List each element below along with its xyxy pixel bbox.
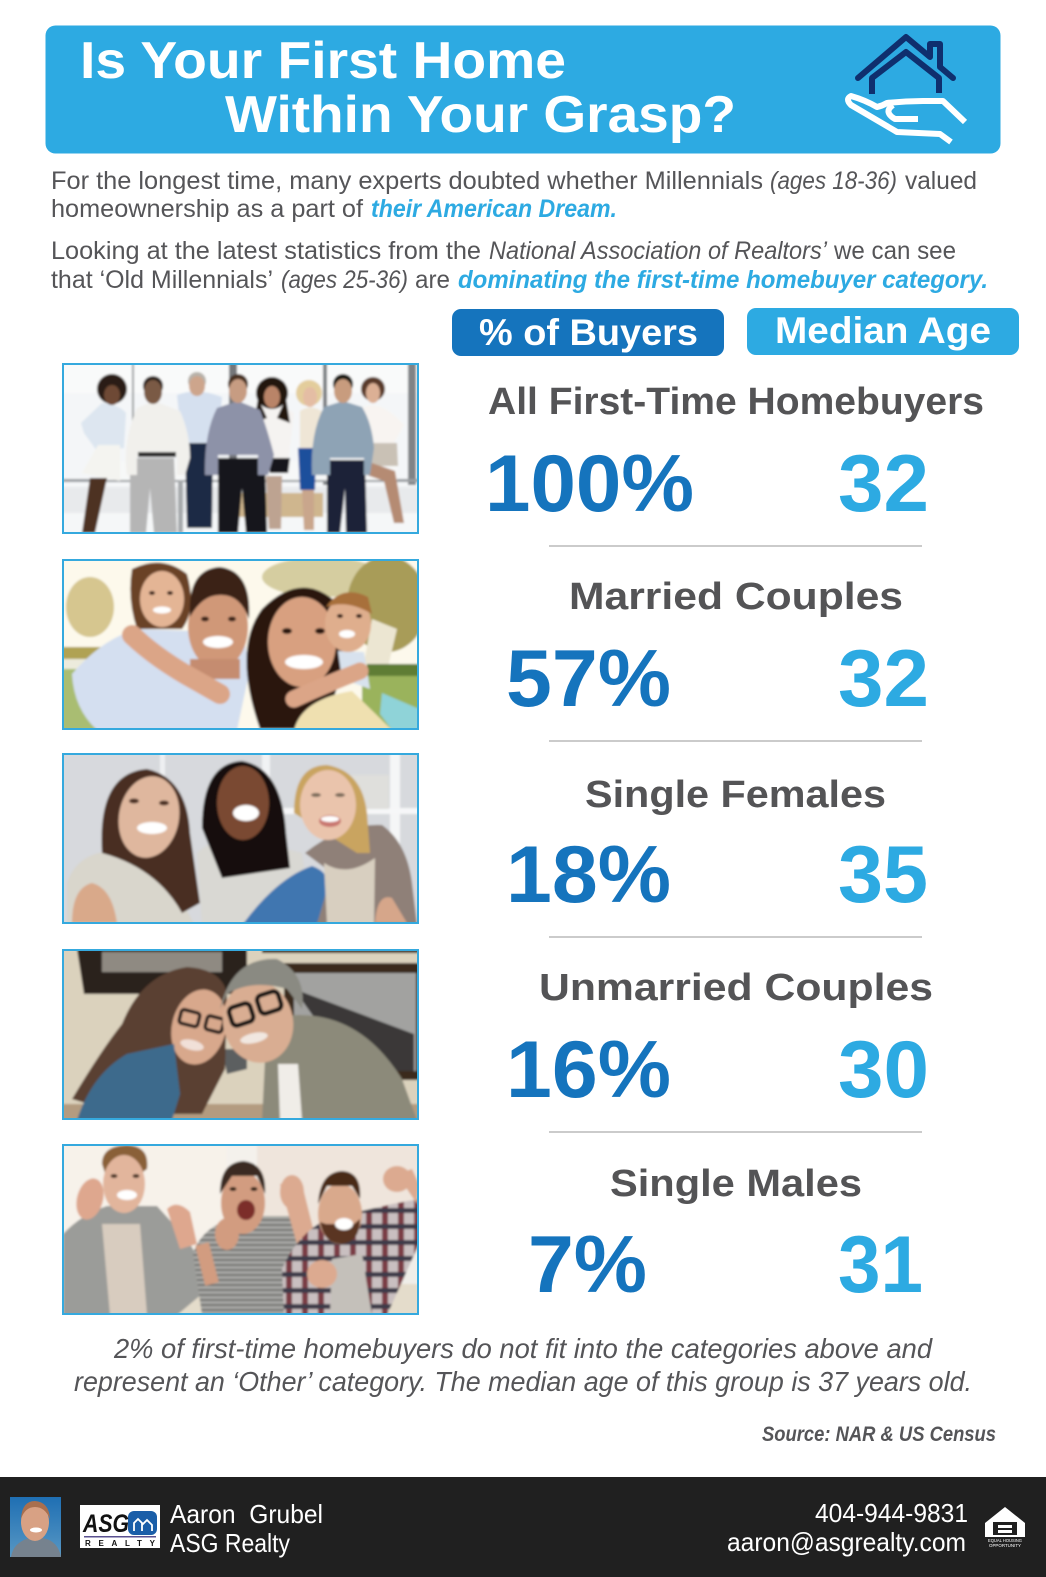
intro paragraph 1: (ages 18-36) [770,167,897,195]
photo border [63,754,418,923]
footnote: 2% of first-time homebuyers do not fit into the categories above and [113,1333,933,1364]
row: single females: Single Females [585,774,886,816]
icon: equal housing opportunity: OPPORTUNITY [989,1543,1021,1548]
contact details [727,1498,968,1557]
photo: single males [62,1144,419,1315]
row: single females [506,774,928,938]
stat: percent of buyers: 57% [506,634,671,724]
stat: median age: 32 [838,439,929,529]
icon: equal housing opportunity: EQUAL HOUSING [988,1538,1022,1543]
photo border [63,1145,418,1314]
intro paragraph 1: valued [905,167,977,195]
column header: % of Buyers: % of Buyers [479,312,698,353]
agent name: ASG Realty [170,1528,290,1558]
footnote: represent an ‘Other’ category. The median age of this group is 37 years old. [74,1366,972,1397]
agent portrait [10,1497,61,1557]
row: single males: Single Males [610,1163,862,1205]
intro paragraph 1: For the longest time, many experts doubted whether Millennials [51,167,763,195]
intro paragraph 2: dominating the first-time homebuyer category. [458,266,988,294]
intro paragraph 1: homeownership as a part of [51,195,363,223]
company logo: ASG [82,1510,129,1538]
stat: median age: 31 [838,1220,923,1310]
row: unmarried couples: Unmarried Couples [539,967,933,1009]
intro paragraph 2 [51,237,988,294]
stat: percent of buyers: 7% [528,1220,647,1310]
row: married couples [506,576,929,742]
photo border [63,364,418,533]
intro paragraph 2: are [415,266,450,294]
intro paragraph 2: that ‘Old Millennials’ [51,266,273,294]
title [80,32,736,144]
contact details: 404-944-9831 [815,1498,968,1528]
row: married couples: Married Couples [569,576,903,618]
stat: percent of buyers: 16% [506,1025,671,1115]
company logo [80,1505,160,1548]
icon: equal housing opportunity [985,1507,1025,1548]
title: Is Your First Home [80,32,566,90]
source: Source: NAR & US Census [762,1423,996,1446]
icon: house in hand [848,37,965,142]
column header: Median Age: Median Age [775,310,991,351]
photo: group of first-time homebuyers [62,363,419,534]
intro paragraph 2: National Association of Realtors’ [489,237,827,265]
agent name [170,1499,323,1558]
intro paragraph 1: their American Dream. [371,195,617,223]
stat: median age: 35 [838,830,928,920]
column header: Median Age [747,308,1019,355]
intro paragraph 1 [51,167,977,223]
title banner [46,26,1000,154]
row: all first-time homebuyers [485,381,984,547]
photo: unmarried couple [62,949,419,1120]
photo border [63,560,418,729]
photo: married couple with children [62,559,419,730]
stat: median age: 32 [838,634,929,724]
company logo: REALTY [85,1539,156,1548]
stat: median age: 30 [838,1025,929,1115]
column header: % of Buyers [452,309,724,356]
title: Within Your Grasp? [225,86,736,144]
stat: percent of buyers: 18% [506,830,671,920]
footnote [74,1333,972,1397]
row: single males [528,1163,923,1310]
intro paragraph 2: we can see [833,237,956,265]
stat: percent of buyers: 100% [485,439,694,529]
intro paragraph 2: (ages 25-36) [281,266,408,294]
photo: single females [62,753,419,924]
intro paragraph 2: Looking at the latest statistics from the [51,237,481,265]
contact details: aaron@asgrealty.com [727,1527,966,1557]
agent name: Aaron Grubel [170,1499,323,1529]
row: unmarried couples [506,967,933,1133]
row: all first-time homebuyers: All First-Time Homebuyers [488,381,984,423]
photo border [63,950,418,1119]
footer bar [0,1477,1046,1577]
